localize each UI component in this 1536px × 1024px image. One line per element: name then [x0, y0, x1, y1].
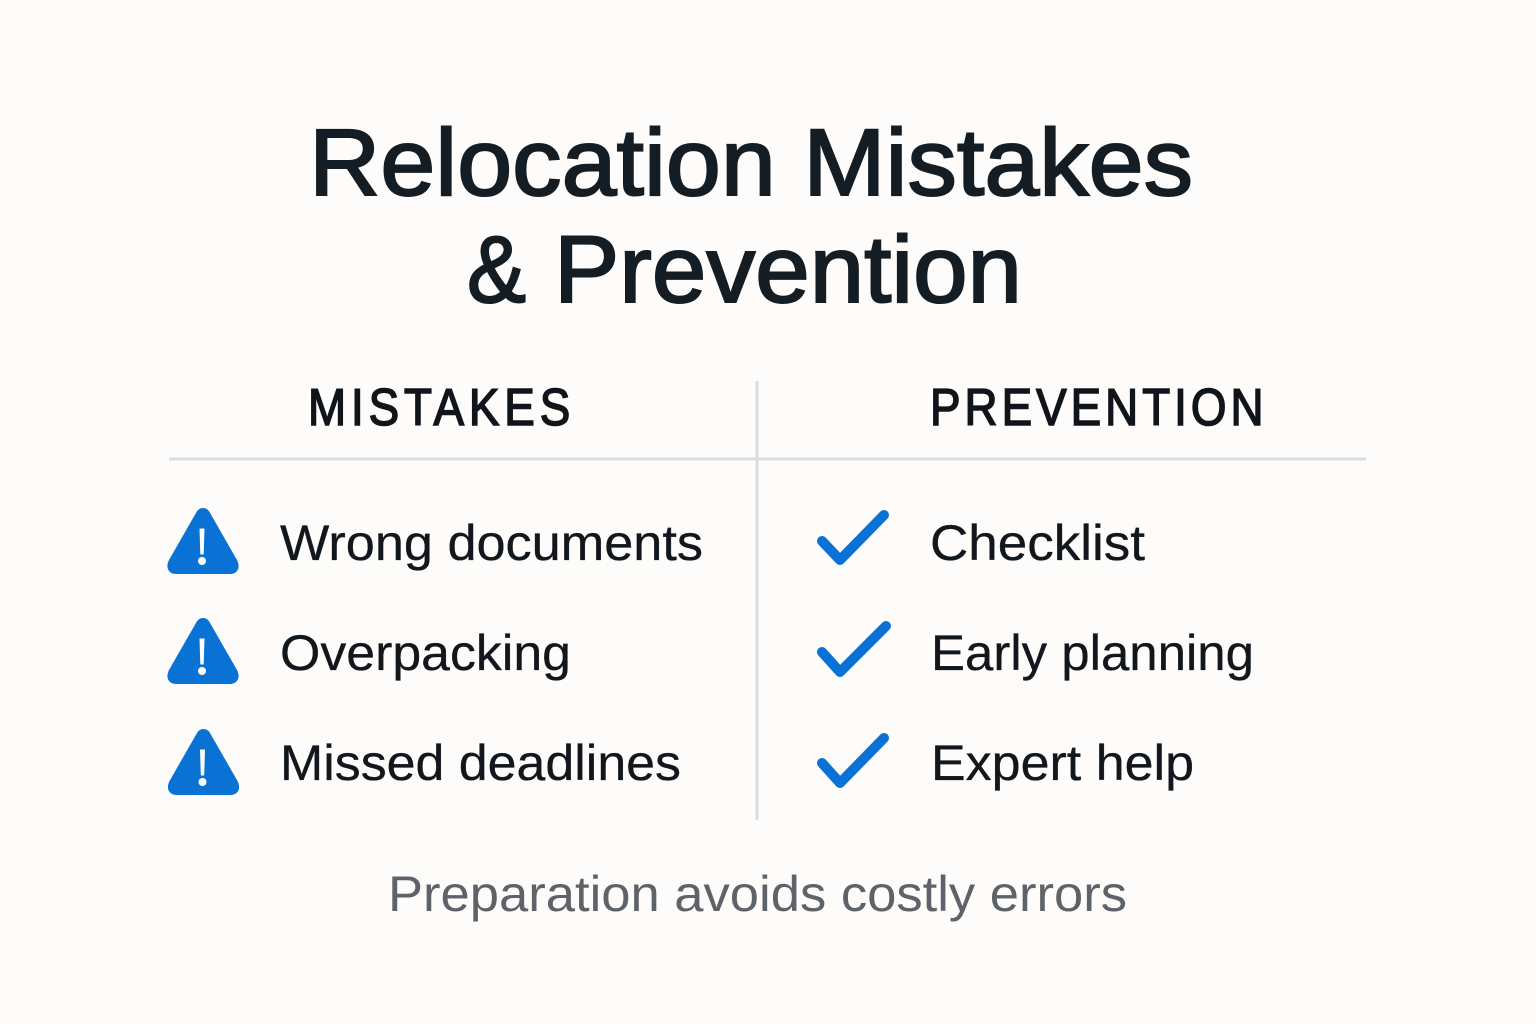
text: missed deadlines: Missed deadlines: [280, 735, 681, 791]
title: Relocation Mistakes: [309, 110, 1193, 216]
icon: warning triangle 2: [167, 618, 239, 684]
heading: prevention: PREVENTION: [930, 379, 1264, 437]
panel: prevention column: [822, 379, 1264, 791]
horizontal header divider: [169, 458, 1366, 460]
icon: check mark 1: [822, 515, 884, 560]
panel: mistakes column: [167, 379, 703, 795]
text: overpacking: Overpacking: [280, 625, 571, 681]
text: wrong documents: Wrong documents: [280, 515, 703, 571]
icon: check mark 2: [822, 626, 886, 672]
icon: check mark 3: [822, 738, 884, 783]
title: Prevention: [554, 217, 1022, 323]
icon: warning triangle 3: [168, 729, 239, 795]
footer tagline: Preparation avoids costly errors: [388, 866, 1127, 922]
title: [309, 110, 1193, 323]
text: checklist: Checklist: [930, 515, 1145, 571]
text: expert help: Expert help: [931, 735, 1194, 791]
heading: mistakes: MISTAKES: [308, 379, 570, 437]
icon: warning triangle 1: [167, 508, 239, 574]
text: early planning: Early planning: [931, 625, 1254, 681]
vertical column divider: [756, 381, 758, 820]
title: &: [467, 217, 526, 323]
